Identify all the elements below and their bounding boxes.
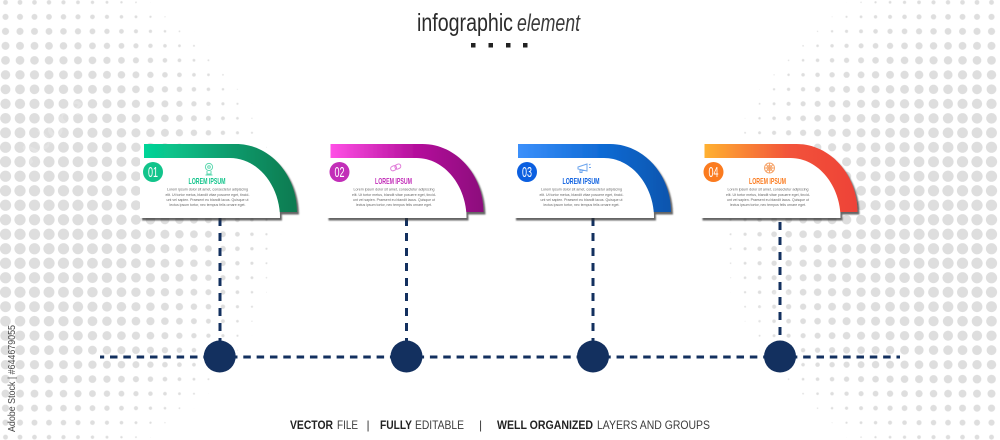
side stock credit: Adobe Stock | #644679055 xyxy=(7,325,18,432)
card 02 body text: elit. Ut tortor metus, blandit vitae posuere eget, tincid- xyxy=(352,193,437,197)
card 01 body text: Lorem ipsum dolor sit amet, consectetur adipiscing xyxy=(167,188,248,192)
watermark text: Adobe Stock xyxy=(523,215,657,349)
card 03 body text xyxy=(540,188,624,207)
card 02 heading: LOREM IPSUM xyxy=(375,176,412,186)
watermark text: Adobe Stock xyxy=(218,280,352,414)
card 02 body text xyxy=(352,188,437,207)
footer caption xyxy=(290,418,710,432)
title: infographic xyxy=(417,9,513,37)
card 02 body text: unt vel sapien. Praesent eu blandit lacus. Quisque ut xyxy=(353,198,435,202)
icon: megaphone xyxy=(578,164,591,172)
timeline node 2 xyxy=(390,340,422,372)
card 03 body text: unt vel sapien. Praesent eu blandit lacus. Quisque ut xyxy=(540,198,622,202)
timeline horizontal dashed line xyxy=(100,356,900,358)
card 02 body text: lectus ipsum tortor, nec tempus felis ornare eget. xyxy=(356,203,432,207)
footer caption: WELL ORGANIZED xyxy=(497,418,593,432)
card 04 number badge xyxy=(704,162,724,182)
footer caption: FILE xyxy=(337,418,358,432)
title: element xyxy=(517,10,581,37)
icon: linked rings xyxy=(390,163,402,172)
card 04 heading: LOREM IPSUM xyxy=(749,176,786,186)
card 03 band and white body xyxy=(514,144,671,218)
card 04 body text: unt vel sapien. Praesent eu blandit lacus. Quisque ut xyxy=(727,198,809,202)
panel: step 02 xyxy=(326,144,484,218)
card 01 heading: LOREM IPSUM xyxy=(188,176,226,186)
card 04 number badge: 04 xyxy=(708,164,718,181)
connector 1 xyxy=(218,218,222,342)
footer caption: LAYERS AND GROUPS xyxy=(597,418,710,432)
card 03 heading: LOREM IPSUM xyxy=(562,176,600,186)
card 01 band and white body xyxy=(140,144,297,218)
card 04 body text: Lorem ipsum dolor sit amet, consectetur adipiscing xyxy=(728,188,808,192)
timeline node 3 xyxy=(577,340,609,372)
card 03 body text: Lorem ipsum dolor sit amet, consectetur adipiscing xyxy=(541,188,622,192)
panel: step 04 xyxy=(700,144,858,218)
card 01 body text: lectus ipsum tortor, nec tempus felis ornare eget. xyxy=(170,203,246,207)
connector 4 xyxy=(778,222,782,342)
card 01 number badge xyxy=(143,162,163,182)
card 02 number badge xyxy=(330,162,350,182)
panel: step 01 xyxy=(140,144,297,218)
connector 3 xyxy=(592,218,594,342)
footer caption: | xyxy=(479,418,482,432)
timeline node 1 xyxy=(204,340,236,372)
card 03 number badge xyxy=(517,162,537,182)
card 01 body text xyxy=(166,188,250,207)
card 04 body text: elit. Ut tortor metus, blandit vitae posuere eget, tincid- xyxy=(726,193,811,197)
card 04 body text: lectus ipsum tortor, nec tempus felis ornare eget. xyxy=(730,203,806,207)
card 01 number badge: 01 xyxy=(148,164,158,181)
panel: step 03 xyxy=(514,144,671,218)
footer caption: EDITABLE xyxy=(415,418,464,432)
card 03 number badge: 03 xyxy=(522,164,532,181)
icon: target wheel xyxy=(764,163,774,173)
watermark text: Adobe xyxy=(13,91,91,169)
footer caption: FULLY xyxy=(380,418,412,432)
watermark text: Adobe xyxy=(218,66,296,144)
timeline node 4 xyxy=(764,340,796,372)
card 03 body text: lectus ipsum tortor, nec tempus felis ornare eget. xyxy=(544,203,620,207)
card 01 body text: unt vel sapien. Praesent eu blandit lacus. Quisque ut xyxy=(166,198,248,202)
card 03 body text: elit. Ut tortor metus, blandit vitae posuere eget, tincid- xyxy=(540,193,624,197)
footer caption: | xyxy=(366,418,370,432)
icon: light bulb xyxy=(205,163,213,175)
watermark text: Adobe Stock xyxy=(333,255,467,389)
card 02 body text: Lorem ipsum dolor sit amet, consectetur adipiscing xyxy=(354,188,434,192)
card 01 body text: elit. Ut tortor metus, blandit vitae posuere eget, tincid- xyxy=(166,193,250,197)
card 02 number badge: 02 xyxy=(334,164,344,181)
footer caption: VECTOR xyxy=(290,418,333,432)
connector 2 xyxy=(405,218,408,342)
card 04 band and white body xyxy=(700,144,858,218)
watermark text: Adobe Stock xyxy=(668,270,802,404)
card 04 body text xyxy=(726,188,811,207)
card 02 band and white body xyxy=(326,144,484,218)
watermark text xyxy=(13,0,802,414)
title dots xyxy=(471,43,528,48)
